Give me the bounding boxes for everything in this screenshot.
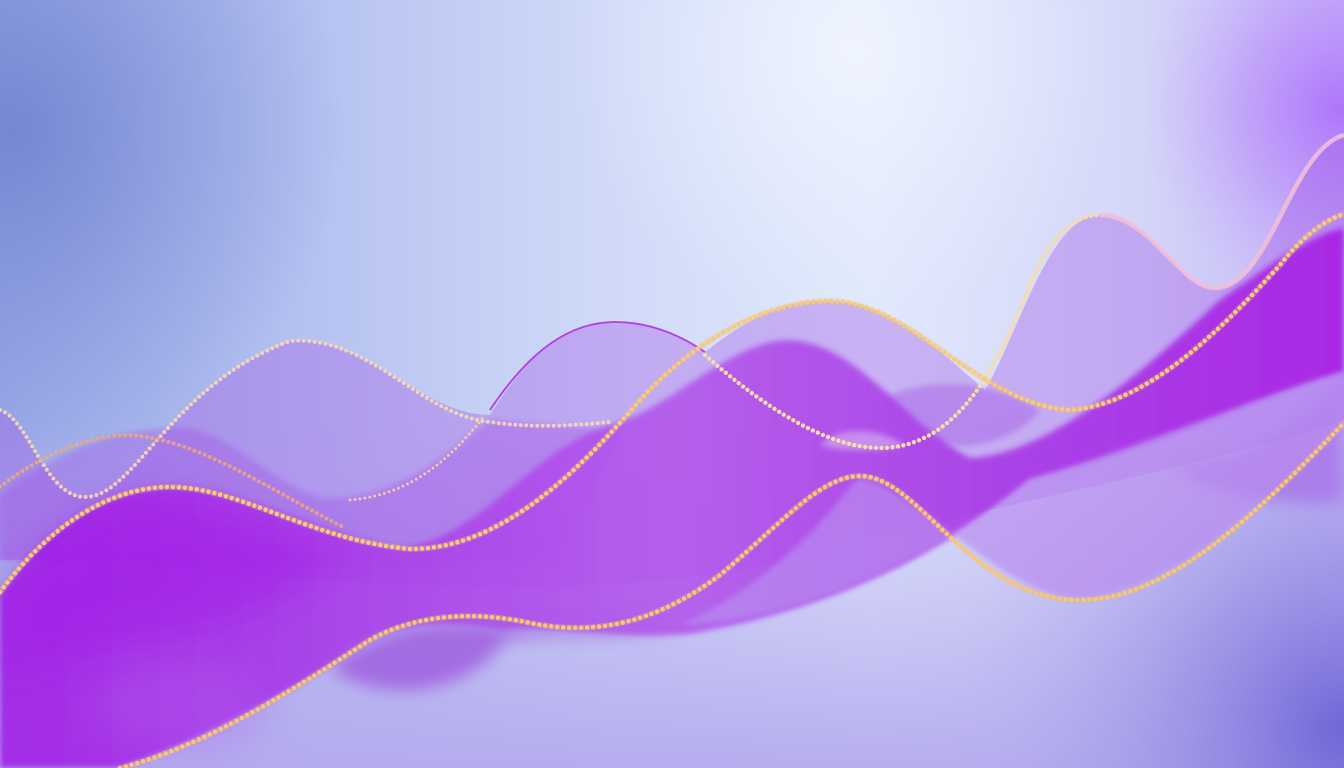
- wave sheet: light hole in magenta band: [820, 431, 905, 450]
- dotted line: left pink faded: [0, 435, 345, 528]
- wave sheet: soft fold below the lower gold line: [330, 623, 680, 690]
- wave sheet: pale translucent upper layer: [0, 135, 1344, 587]
- dotted line: mid crest to right: [705, 215, 1100, 448]
- line: pale upper right: [1100, 135, 1344, 288]
- dotted line: lower gold wave: [120, 423, 1344, 768]
- wave sheet: saturated magenta band: [0, 228, 1344, 768]
- dotted line: pale upper left: [0, 341, 610, 497]
- dotted line: lower end of crest: [350, 415, 485, 500]
- wave sheet: lower pale fold: [680, 372, 1344, 625]
- wave sheet: hump behind the right side: [880, 384, 1040, 446]
- wave sheet: mid-tone left layer: [0, 420, 620, 570]
- wave sheet: soft shadow lower right: [1170, 370, 1344, 503]
- thin line: magenta crest: [490, 322, 705, 410]
- dotted line: main gold through centre: [0, 214, 1344, 592]
- wave sheet: lighter blotch bottom left: [95, 660, 265, 750]
- wave sheet: saturated left foreground: [0, 505, 340, 680]
